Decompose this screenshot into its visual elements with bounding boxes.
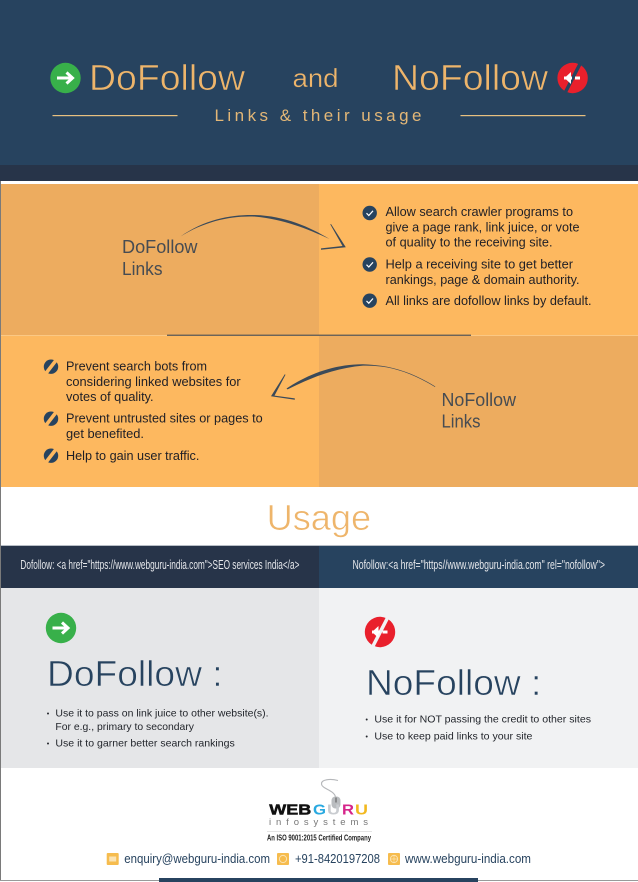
icon: red broken link xyxy=(557,62,588,93)
arrow: to NoFollow list xyxy=(271,364,435,400)
list: NoFollow effects: considering linked websites for xyxy=(66,375,241,389)
list: NoFollow usage xyxy=(366,714,591,743)
website: www.webguru-india.com xyxy=(404,851,531,866)
contact bar xyxy=(107,851,531,866)
icon: mouse and cable xyxy=(321,780,340,808)
list: NoFollow effects xyxy=(44,359,263,464)
title: and: and xyxy=(292,63,338,93)
label: DoFollow Links: Links xyxy=(122,259,162,279)
panel: DoFollow links xyxy=(0,184,638,335)
list: NoFollow usage: Use it for NOT passing the credit to other sites xyxy=(374,714,591,726)
list: DoFollow benefits: All links are dofollow links by default. xyxy=(386,294,592,308)
logo: Webguru Infosystems: R xyxy=(342,801,354,818)
list: NoFollow effects: Prevent search bots from xyxy=(66,360,207,374)
list: NoFollow effects: Prevent untrusted sites or pages to xyxy=(66,412,263,426)
title: DoFollow: DoFollow xyxy=(89,57,246,98)
panel: code examples xyxy=(0,545,638,588)
icon: green arrow xyxy=(50,63,81,93)
icon: check xyxy=(362,257,377,272)
logo: Webguru Infosystems: U xyxy=(327,801,340,818)
label: NoFollow Links: Links xyxy=(442,411,480,431)
panel: NoFollow usage xyxy=(319,588,638,768)
icon: green arrow xyxy=(46,613,76,643)
heading: Usage: Usage xyxy=(267,497,371,538)
label: DoFollow Links xyxy=(122,237,198,279)
certification: An ISO 9001:2015 Certified Company xyxy=(267,834,371,843)
title: NoFollow: NoFollow xyxy=(392,57,549,98)
list: NoFollow effects: Help to gain user traffic. xyxy=(66,449,199,463)
list: DoFollow benefits xyxy=(362,205,592,308)
list: NoFollow usage: Use to keep paid links to your site xyxy=(374,731,533,743)
email: enquiry@webguru-india.com xyxy=(124,851,270,866)
icon: slash xyxy=(44,411,58,426)
heading: DoFollow: DoFollow : xyxy=(47,653,223,694)
list: DoFollow benefits: of quality to the receiving site. xyxy=(386,236,552,250)
label: NoFollow Links: NoFollow xyxy=(442,390,517,410)
panel: header banner xyxy=(0,0,638,181)
list: DoFollow benefits: Help a receiving site to get better xyxy=(386,258,573,272)
panel: NoFollow links xyxy=(0,336,638,487)
code: dofollow: Dofollow: <a href="https://www.webguru-india.com">SEO services India</a> xyxy=(20,557,299,572)
icon: red broken link xyxy=(365,616,395,647)
label: NoFollow Links xyxy=(442,390,517,431)
list: NoFollow effects: votes of quality. xyxy=(66,390,154,404)
tagline: infosystems xyxy=(269,817,368,828)
wordmark: WEB xyxy=(269,801,311,818)
arrow: to DoFollow list xyxy=(180,215,346,250)
icon: slash xyxy=(44,448,58,464)
list: DoFollow usage: Use it to garner better search rankings xyxy=(55,738,235,750)
icon: check xyxy=(362,294,377,308)
list: DoFollow usage: Use it to pass on link juice to other website(s). xyxy=(55,708,269,720)
list: NoFollow effects: get benefited. xyxy=(66,427,144,441)
phone: +91-8420197208 xyxy=(295,851,380,866)
icon: slash xyxy=(44,359,58,374)
logo: Webguru Infosystems: U xyxy=(355,801,368,818)
heading: NoFollow: NoFollow : xyxy=(366,662,541,703)
list: DoFollow benefits: Allow search crawler programs to xyxy=(386,205,573,219)
list: DoFollow usage: For e.g., primary to secondary xyxy=(55,721,195,733)
icon: phone xyxy=(277,853,289,865)
list: DoFollow benefits: rankings, page & domain authority. xyxy=(386,273,580,287)
icon: check xyxy=(362,206,377,220)
list: DoFollow usage xyxy=(47,708,269,750)
panel: DoFollow usage xyxy=(0,588,319,768)
icon: email xyxy=(107,853,119,865)
list: DoFollow benefits: give a page rank, link juice, or vote xyxy=(386,221,580,235)
logo: Webguru Infosystems xyxy=(267,780,372,843)
logo: Webguru Infosystems: G xyxy=(313,801,326,818)
subtitle: Links & their usage xyxy=(214,106,422,125)
icon: web xyxy=(388,853,400,865)
label: DoFollow Links: DoFollow xyxy=(122,237,198,257)
